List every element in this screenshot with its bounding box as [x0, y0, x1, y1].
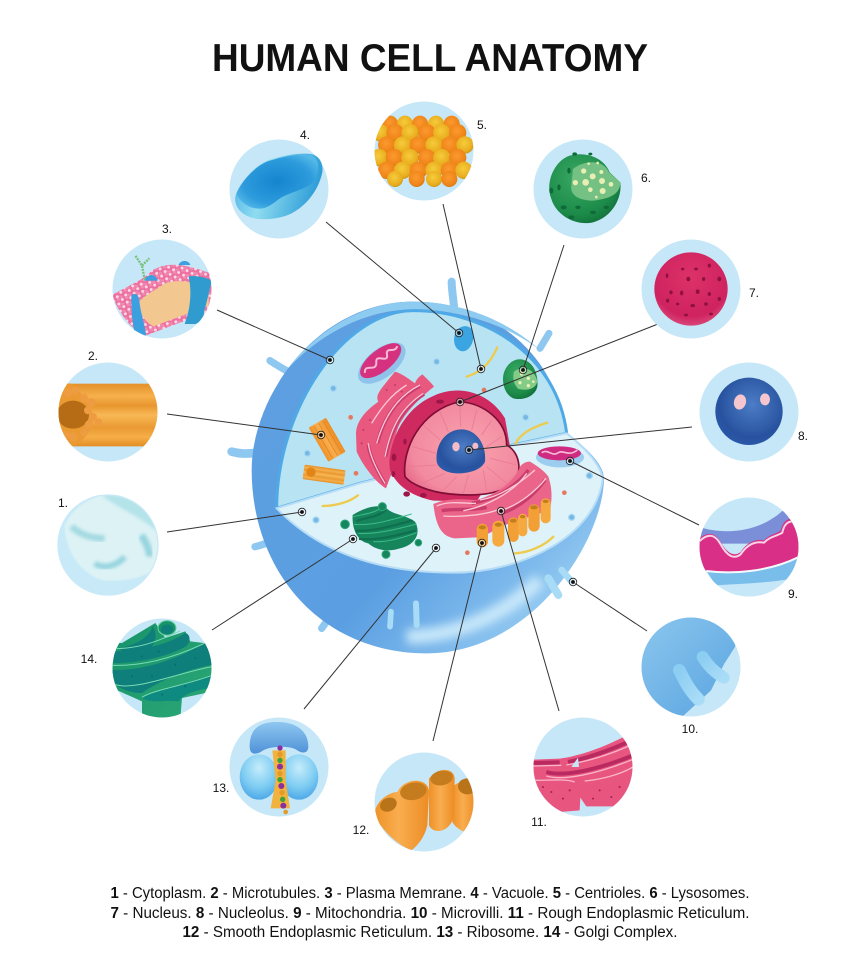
inset 3: plasma membrane: [112, 240, 212, 338]
vacuole: [454, 326, 474, 351]
inset numbers: 5.: [477, 118, 487, 132]
inset 6: lysosomes: [534, 140, 632, 238]
mitochondrion upper: [351, 335, 413, 392]
legend text: 12 - Smooth Endoplasmic Reticulum. 13 - Ribosome. 14 - Golgi Complex.: [182, 924, 678, 941]
outer shell of cell: [252, 302, 604, 653]
inset 11: rough endoplasmic reticulum: [533, 718, 635, 816]
rough endoplasmic reticulum upper: [356, 372, 434, 488]
microvilli on outer surface: [232, 282, 549, 628]
nucleus folds: [408, 407, 517, 493]
nucleolus: [437, 429, 485, 473]
cytoplasm back wall: [277, 311, 567, 508]
inset numbers: 11.: [531, 815, 547, 829]
inset 14: golgi complex: [112, 619, 214, 718]
legend text: 1 - Cytoplasm. 2 - Microtubules. 3 - Plasma Memrane. 4 - Vacuole. 5 - Centrioles. 6 - Lysosomes.: [110, 885, 750, 902]
inset 9: mitochondria: [699, 498, 801, 600]
inset 7: nucleus: [642, 240, 740, 338]
inset 1: cytoplasm: [57, 493, 165, 596]
leader lines: [167, 204, 699, 741]
microtubule organelle upper: [309, 418, 346, 462]
inset 12: smooth endoplasmic reticulum: [374, 753, 477, 851]
inset numbers: 10.: [682, 722, 698, 736]
legend text: 7 - Nucleus. 8 - Nucleolus. 9 - Mitochondria. 10 - Microvilli. 11 - Rough Endoplasmic Reticulum.: [110, 905, 750, 922]
small red granules: [348, 388, 567, 555]
shell highlight: [407, 580, 540, 637]
inset 5: centrioles: [370, 102, 474, 200]
small vesicles: [304, 359, 592, 523]
cell diagram: [232, 282, 604, 653]
inset 2: microtubules: [57, 363, 158, 461]
inset 4: vacuole: [230, 140, 328, 238]
inset numbers: 12.: [353, 823, 369, 837]
nuclear pores: [391, 400, 444, 498]
marker centres: [300, 331, 575, 584]
inset numbers: 13.: [213, 781, 229, 795]
centriole curves: [323, 347, 553, 553]
inset numbers: 9.: [788, 587, 798, 601]
title: HUMAN CELL ANATOMY: [212, 37, 648, 80]
legend text: [110, 885, 750, 941]
mitochondrion right: [536, 446, 584, 467]
golgi complex: [341, 503, 422, 558]
inset numbers: 2.: [88, 349, 98, 363]
inset numbers: 4.: [300, 128, 310, 142]
inset numbers: 3.: [162, 222, 172, 236]
inset numbers: 6.: [641, 171, 651, 185]
inset numbers: 8.: [798, 429, 808, 443]
inset 10: microvilli: [641, 617, 741, 717]
inner microvilli in the shell: [390, 570, 572, 627]
smooth endoplasmic reticulum: [482, 503, 546, 542]
inset numbers: 7.: [749, 286, 759, 300]
cytoplasm floor: [277, 433, 603, 573]
marker dots: [298, 329, 577, 586]
inset numbers: [58, 118, 808, 837]
infographic: human cell anatomy: [57, 44, 807, 940]
lysosome: [503, 359, 537, 399]
inset 8: nucleolus: [700, 363, 798, 461]
tube openings: [479, 500, 549, 529]
microtubule organelle lower: [303, 465, 346, 485]
top rim highlight: [287, 302, 540, 370]
nucleus body: [390, 391, 510, 502]
nucleus interior: [405, 402, 519, 495]
inset 13: ribosome: [230, 718, 328, 816]
inset numbers: 14.: [81, 652, 97, 666]
rough endoplasmic reticulum lower: [433, 462, 552, 538]
inset numbers: 1.: [58, 496, 68, 510]
